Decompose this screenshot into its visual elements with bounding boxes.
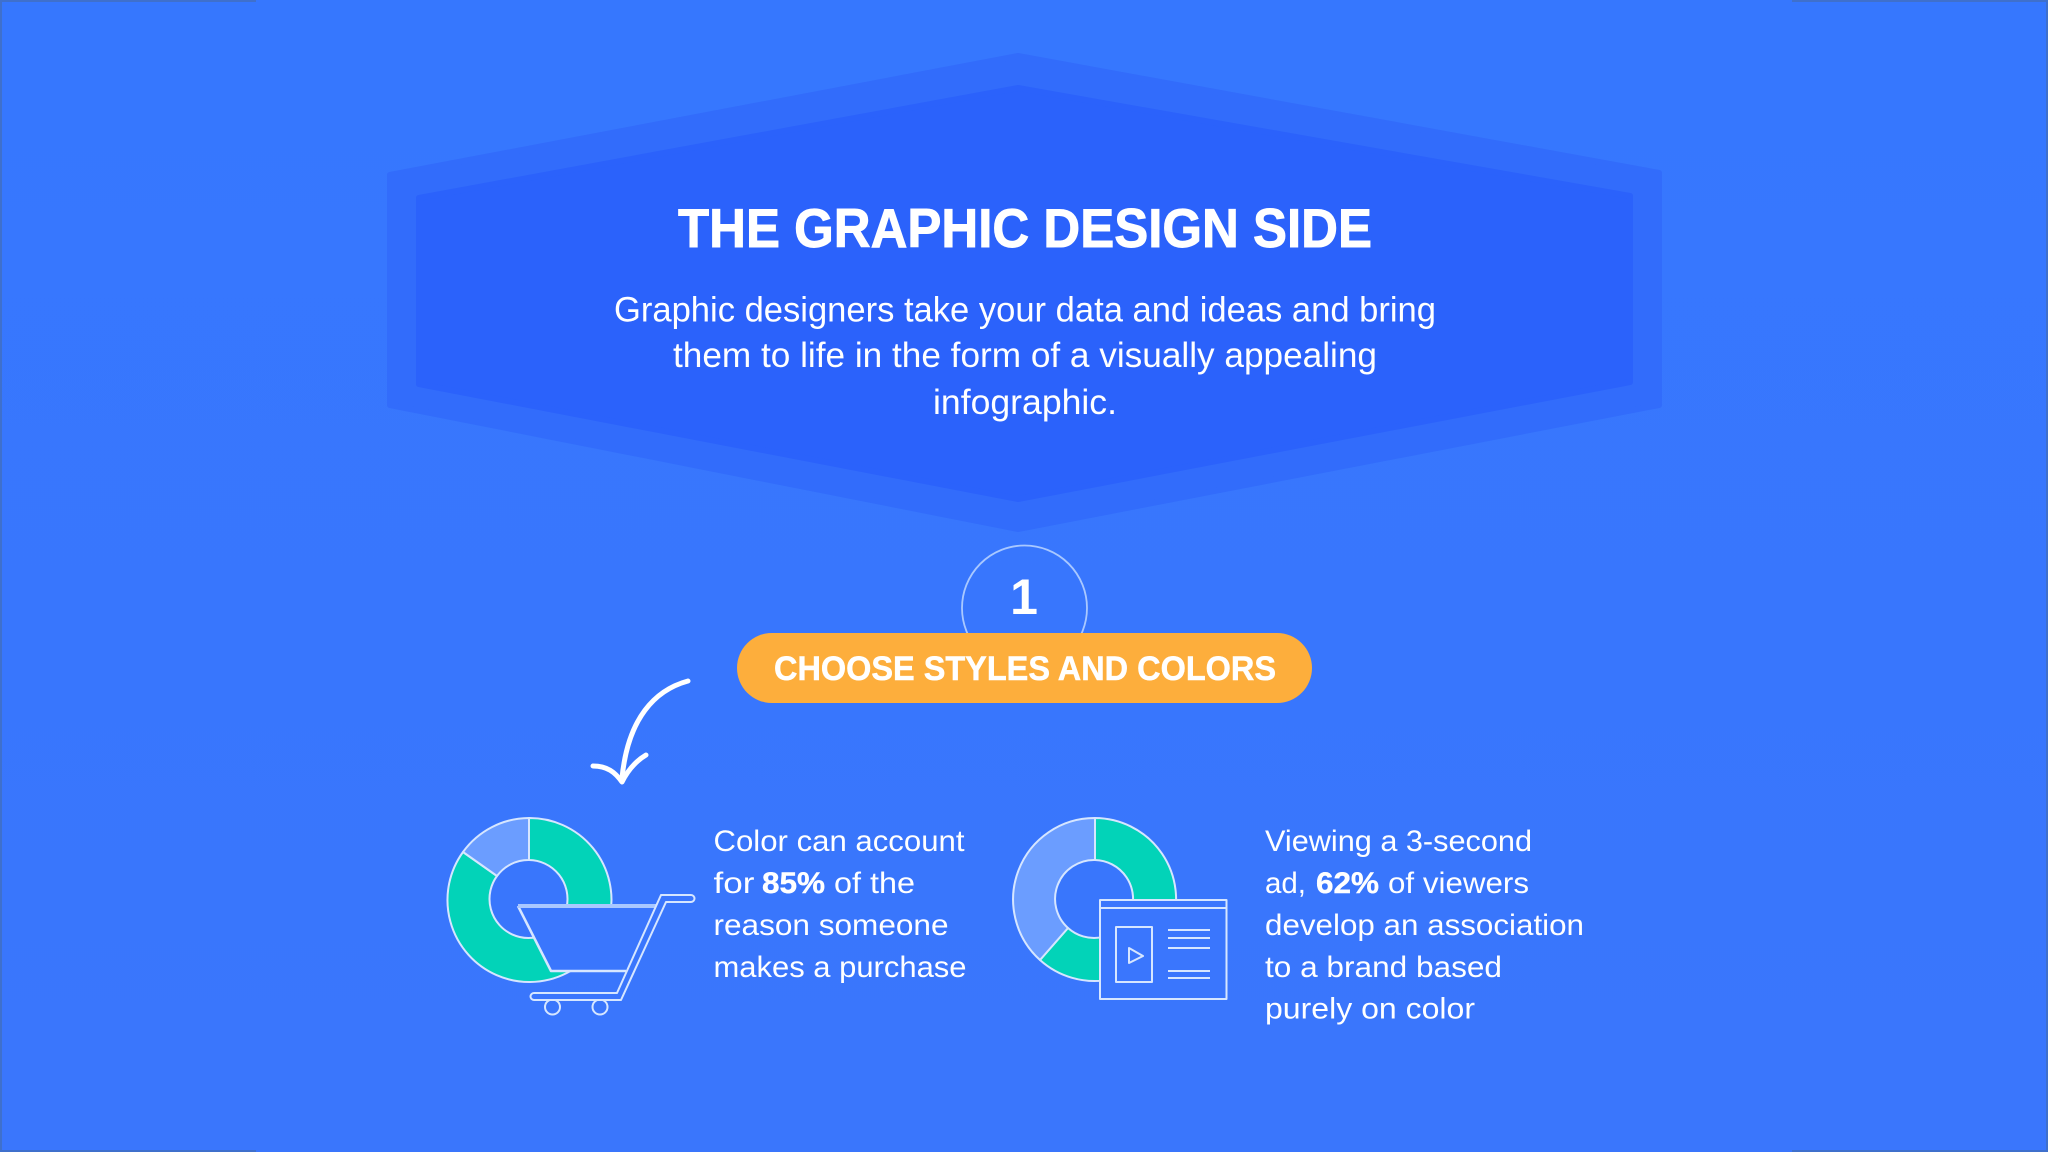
title: THE GRAPHIC DESIGN SIDE	[678, 197, 1372, 259]
step number circle	[962, 546, 1087, 670]
stat text: 85%: Color can account	[714, 825, 965, 858]
step label pill: CHOOSE STYLES AND COLORS	[774, 650, 1276, 688]
stat text: 62%	[1265, 825, 1584, 1026]
step number circle: 1	[1010, 569, 1038, 625]
stat text: 62%: to a brand based	[1265, 951, 1502, 984]
icon: curved arrow	[593, 681, 688, 782]
inner hexagon	[419, 88, 1630, 499]
donut green segment	[1040, 818, 1176, 981]
outer hexagon	[390, 56, 1659, 529]
step label pill	[737, 633, 1312, 703]
stat text: 85%: makes a purchase	[714, 951, 966, 984]
icon: donut chart with shopping cart	[447, 818, 694, 1014]
stat text: 85%: of the	[834, 867, 915, 900]
stat text: 62%: ad,	[1265, 867, 1306, 900]
intro text: them to life in the form of a visually appealing	[673, 336, 1377, 375]
stat text: 62%: purely on color	[1265, 992, 1475, 1026]
stat text: 62%: of viewers	[1388, 867, 1529, 900]
panel: header hexagon	[390, 56, 1659, 529]
stat text: 85%: 85%	[762, 867, 825, 900]
donut light segment	[463, 818, 529, 876]
stat text: 62%: 62%	[1316, 867, 1379, 900]
stat text: 85%: for	[714, 867, 755, 900]
donut light segment	[1013, 818, 1095, 960]
stat text: 62%: develop an association	[1265, 909, 1584, 942]
intro text: Graphic designers take your data and ideas and bring	[614, 290, 1436, 330]
stat text: 85%	[714, 825, 966, 984]
stat text: 62%: Viewing a 3-second	[1265, 825, 1532, 858]
ad window	[1100, 900, 1226, 999]
intro text: infographic.	[933, 383, 1117, 422]
stat text: 85%: reason someone	[714, 909, 948, 942]
cart	[518, 895, 694, 1014]
donut green segment	[447, 818, 611, 982]
intro text	[614, 290, 1436, 422]
icon: donut chart with ad window	[1013, 818, 1226, 999]
